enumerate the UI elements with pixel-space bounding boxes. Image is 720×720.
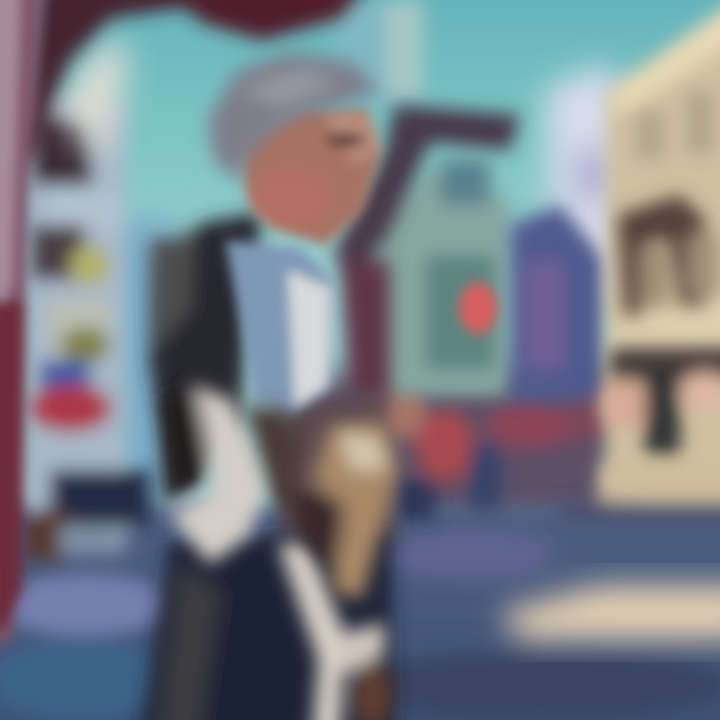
trousers (140, 530, 395, 720)
left street buildings (25, 100, 150, 560)
dark roof (335, 105, 520, 400)
right cream building (606, 0, 720, 490)
hair (208, 52, 380, 182)
distant tower (335, 0, 425, 110)
dark vest (150, 212, 262, 495)
backing shadow behind the boy's arm (280, 395, 395, 540)
purple building (510, 205, 605, 400)
sunlight patch on the street (500, 585, 720, 640)
distant white building (545, 65, 640, 300)
boy figure (140, 52, 398, 720)
arch highlight (65, 35, 130, 160)
maroon arch (20, 0, 370, 160)
building windows (618, 195, 718, 315)
shopfront arcade (560, 348, 720, 519)
street crowd (374, 375, 610, 520)
shirt (225, 240, 335, 415)
white jacket folds (160, 385, 268, 565)
green building (375, 160, 510, 395)
arm and hand (245, 405, 398, 600)
left pillar (0, 0, 44, 650)
trouser stripe (278, 540, 392, 720)
head (240, 108, 382, 245)
mid street backdrop (110, 220, 620, 525)
ground (0, 505, 720, 720)
red sign (459, 282, 497, 334)
